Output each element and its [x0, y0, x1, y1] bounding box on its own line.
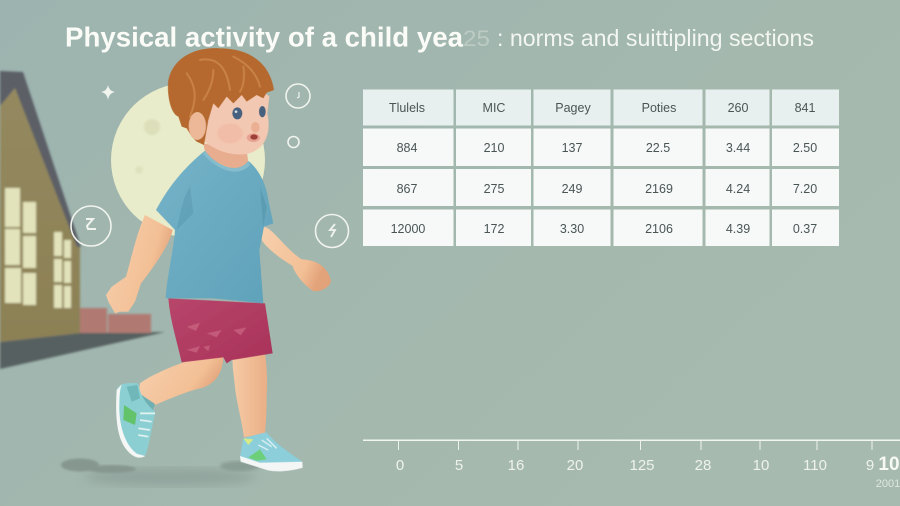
- header row: Poties: [642, 101, 676, 115]
- axis labels: 28: [695, 457, 711, 474]
- icon: sparkle: [101, 85, 115, 100]
- moon: [111, 83, 265, 237]
- axis labels: 20: [567, 457, 583, 474]
- axis labels: 5: [455, 457, 463, 474]
- windows: [5, 188, 71, 308]
- row 1: 210: [484, 141, 504, 155]
- row 2: [363, 169, 839, 206]
- front shoe: [240, 432, 303, 471]
- row 3: 2106: [645, 222, 673, 236]
- house roof: [0, 71, 81, 247]
- row 3: 4.39: [726, 222, 750, 236]
- hair: [168, 48, 274, 145]
- row 3: 172: [484, 222, 504, 236]
- axis labels: 10: [753, 457, 769, 474]
- row 2: 2169: [645, 182, 673, 196]
- header row: 260: [728, 101, 748, 115]
- row 1: 2.50: [793, 141, 817, 155]
- head: [168, 48, 274, 154]
- front leg: [233, 353, 267, 437]
- axis labels: 10: [878, 454, 900, 475]
- house: [0, 71, 165, 369]
- icon: large left circle: [71, 206, 111, 246]
- t-shirt: [156, 151, 273, 303]
- icon: small top circle: [286, 84, 310, 108]
- header row: MIC: [483, 101, 505, 115]
- face: [197, 90, 269, 154]
- title: : norms and suittipling sections: [497, 25, 814, 51]
- child figure: [106, 48, 331, 471]
- shorts: [168, 298, 273, 363]
- house wall: [0, 88, 80, 342]
- header row: 841: [795, 101, 815, 115]
- decorative icons: [71, 84, 348, 248]
- timeline axis: [363, 440, 900, 490]
- row 2: 7.20: [793, 182, 817, 196]
- back shoe: [116, 383, 155, 458]
- title: Physical activity of a child yea: [65, 22, 463, 52]
- header row: [363, 90, 839, 126]
- back sock: [136, 393, 155, 413]
- left arm: [106, 215, 173, 313]
- row 2: 275: [484, 182, 504, 196]
- row 1: [363, 128, 839, 166]
- row 2: 249: [562, 182, 582, 196]
- row 2: 867: [397, 182, 417, 196]
- row 3: [363, 210, 839, 246]
- row 3: 12000: [391, 222, 425, 236]
- icon: ring: [288, 136, 299, 148]
- ground shadows: [61, 458, 260, 486]
- back leg: [138, 357, 223, 405]
- axis labels: 9: [866, 457, 874, 474]
- eyes: [232, 107, 242, 119]
- brick wall: [80, 308, 151, 333]
- axis labels: 125: [629, 457, 655, 474]
- data table: [363, 90, 839, 246]
- right arm: [262, 227, 331, 291]
- row 3: 3.30: [560, 222, 584, 236]
- row 1: 3.44: [726, 141, 750, 155]
- title: 25: [463, 26, 490, 51]
- row 1: 137: [562, 141, 582, 155]
- axis labels: [396, 454, 900, 490]
- neck: [203, 143, 248, 168]
- title: [65, 22, 814, 52]
- row 3: 0.37: [793, 222, 817, 236]
- row 1: 884: [397, 141, 417, 155]
- axis labels: 16: [508, 457, 524, 474]
- axis labels: 110: [803, 457, 827, 474]
- axis labels: 0: [396, 457, 404, 474]
- ground shadow: [0, 332, 165, 369]
- mouth: [247, 133, 260, 142]
- axis labels: 2001: [876, 478, 900, 490]
- row 2: 4.24: [726, 182, 750, 196]
- nose: [251, 122, 260, 133]
- header row: Pagey: [555, 101, 591, 115]
- row 1: 22.5: [646, 141, 670, 155]
- header row: Tlulels: [389, 101, 425, 115]
- icon: large right circle: [316, 214, 348, 248]
- ear: [189, 112, 206, 140]
